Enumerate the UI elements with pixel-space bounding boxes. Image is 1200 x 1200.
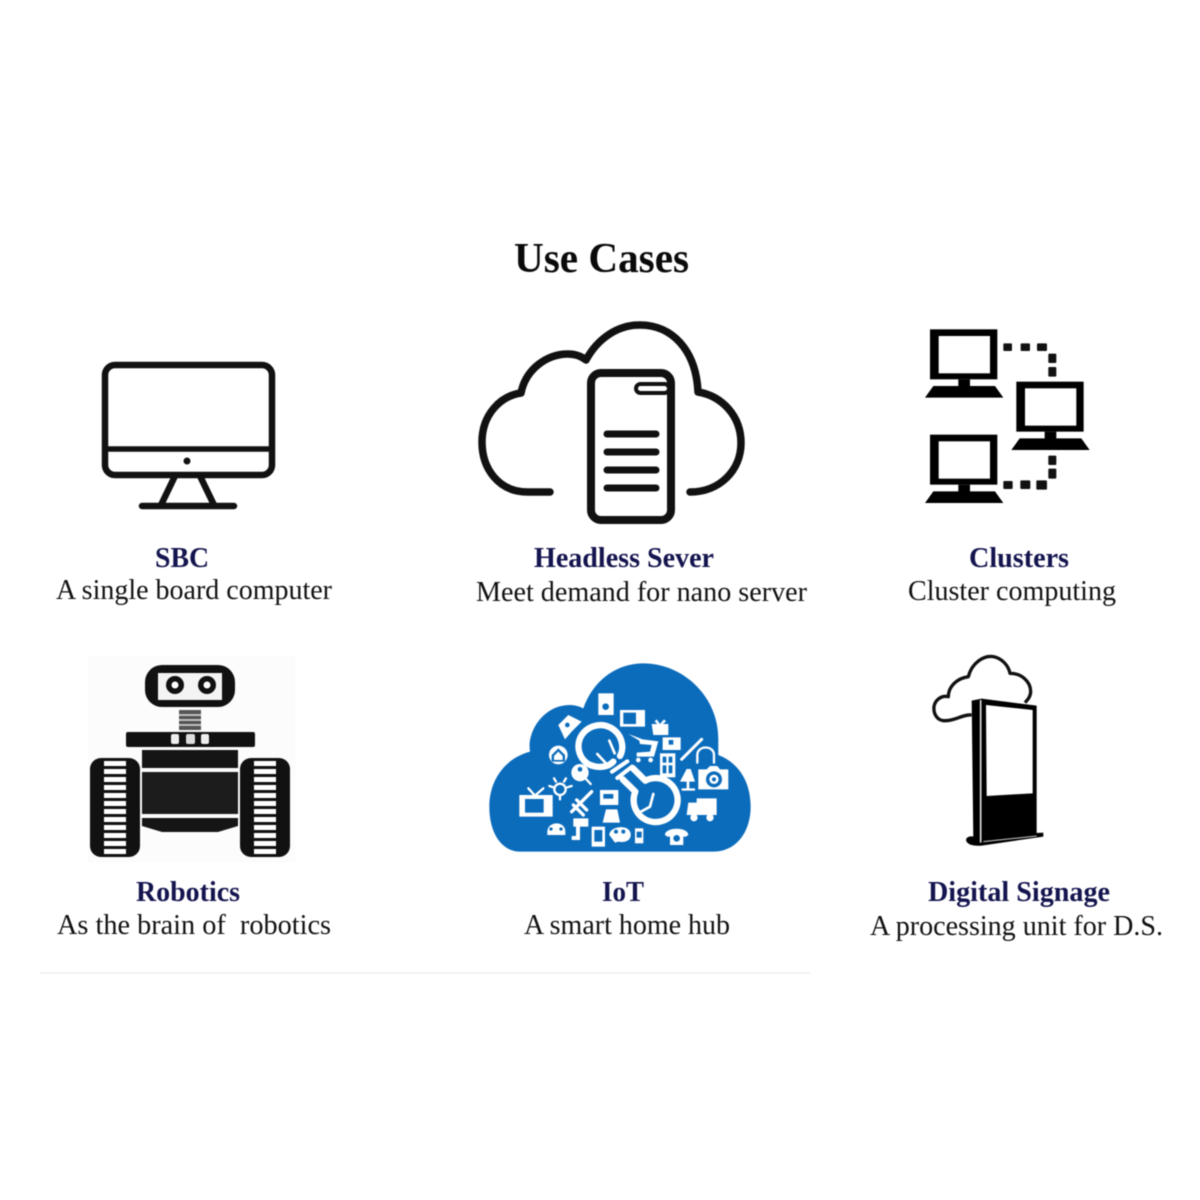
description: Robotics: As the brain of robotics <box>57 910 331 941</box>
smart device icons <box>519 693 728 847</box>
heading: IoT: IoT <box>602 877 644 908</box>
icon: networked computers <box>925 329 1090 503</box>
icon: desktop monitor <box>105 365 272 506</box>
description: SBC: A single board computer <box>56 575 333 606</box>
description: Headless Sever: Meet demand for nano server <box>476 577 808 608</box>
icon: cloud and signage kiosk <box>934 656 1043 846</box>
panel: Robotics <box>57 656 331 941</box>
icon: cloud with server <box>482 325 741 520</box>
description: Clusters: Cluster computing <box>908 576 1116 607</box>
panel: Clusters <box>908 329 1116 607</box>
heading: Headless Sever: Headless Sever <box>534 543 714 574</box>
panel: Headless Sever <box>476 325 808 608</box>
panel: IoT <box>489 663 751 941</box>
description: Digital Signage: A processing unit for D.S. <box>870 911 1163 942</box>
heading: SBC: SBC <box>155 543 209 574</box>
heading: Robotics: Robotics <box>136 877 240 908</box>
panel: SBC <box>56 365 333 606</box>
heading: Clusters: Clusters <box>969 543 1069 574</box>
icon: blue cloud with smart devices <box>489 663 751 852</box>
title: Use Cases <box>514 236 689 282</box>
icon: tracked robot <box>90 665 290 857</box>
large light bulb <box>578 725 678 822</box>
description: IoT: A smart home hub <box>524 910 730 941</box>
panel: Digital Signage <box>870 656 1163 942</box>
heading: Digital Signage: Digital Signage <box>928 877 1110 908</box>
